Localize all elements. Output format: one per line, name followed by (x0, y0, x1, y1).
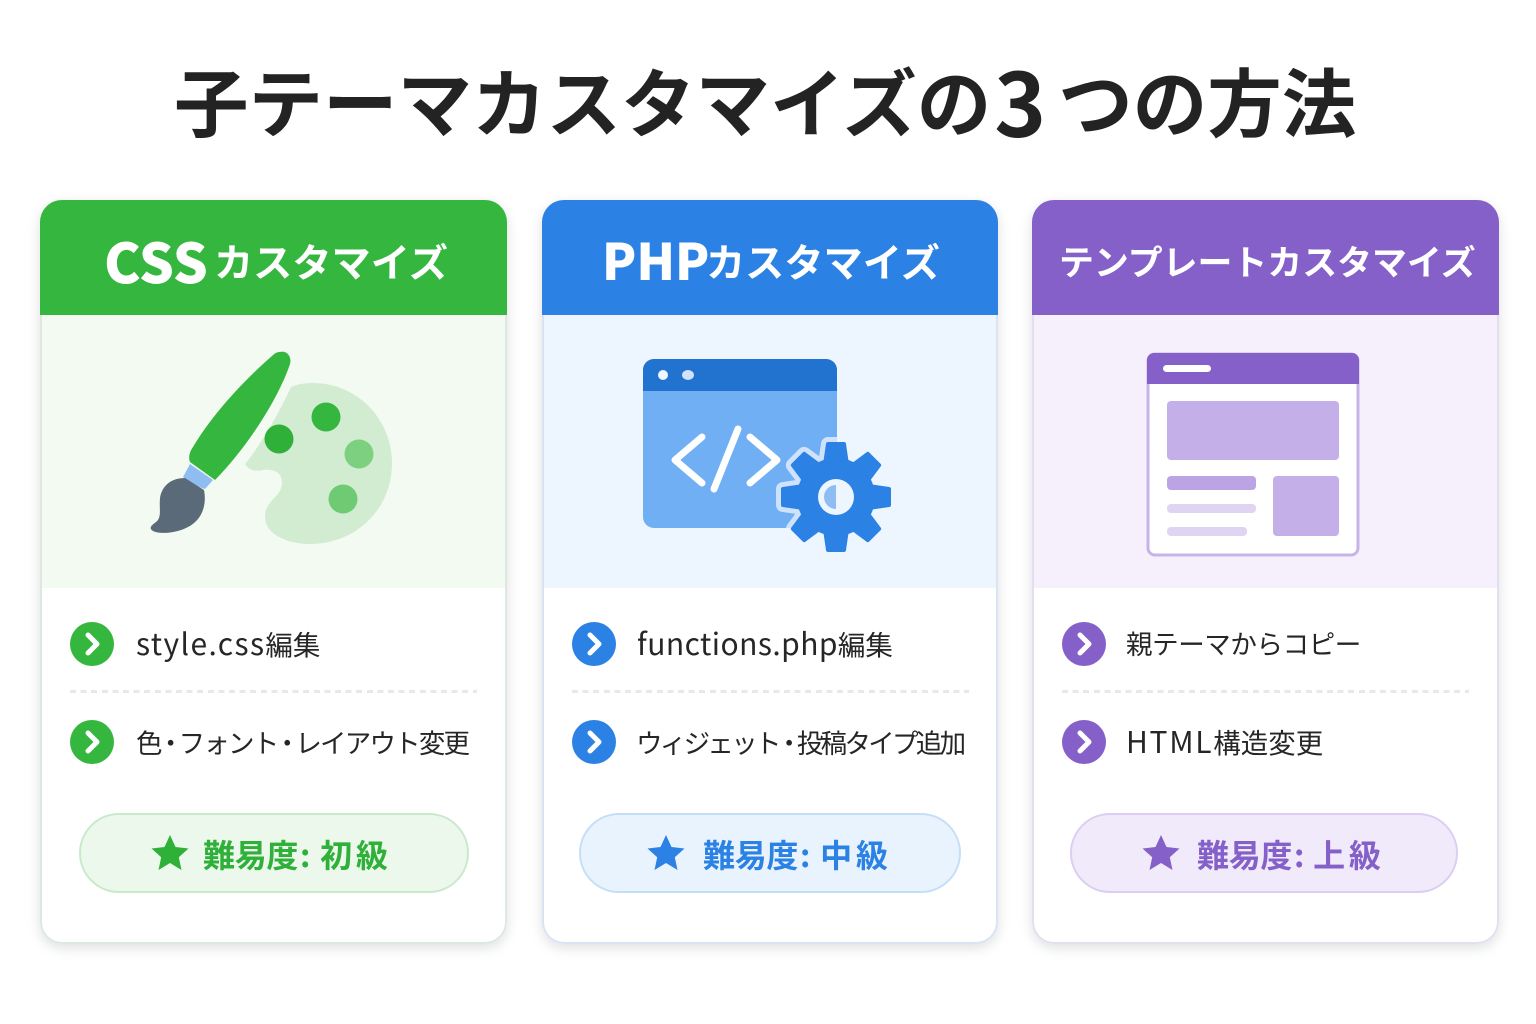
badge: difficulty beginner: : (300, 831, 310, 877)
badge: difficulty beginner: 難易度 初級 (203, 831, 388, 877)
item: copy from parent: 親テーマからコピー (1126, 623, 1361, 662)
illustration: brush and palette (40, 315, 507, 588)
panel: template customization (1032, 200, 1499, 944)
heading: CSS: CSS (104, 219, 208, 299)
badge: difficulty intermediate (579, 813, 961, 893)
heading: PHP (542, 200, 998, 315)
badge: difficulty intermediate: : (800, 831, 810, 877)
illustration: code window and gear (542, 315, 998, 588)
item: HTML structure: HTML構造変更 (1126, 718, 1323, 762)
heading: PHP: カスタマイズ (706, 233, 940, 289)
heading: CSS (40, 200, 507, 315)
badge: difficulty advanced (1070, 813, 1458, 893)
panel: PHP customization (542, 200, 998, 944)
title: 3 (994, 36, 1046, 163)
badge: difficulty advanced: 難易度 上級 (1197, 831, 1381, 877)
item: copy from parent (1062, 622, 1361, 666)
item: color font layout: 色・フォント・レイアウト変更 (136, 722, 468, 761)
panel: CSS customization (40, 200, 507, 944)
heading: template (1032, 200, 1499, 315)
badge: difficulty advanced: : (1294, 831, 1304, 877)
heading: CSS: カスタマイズ (214, 233, 448, 289)
illustration: page layout (1032, 315, 1499, 588)
item: widget post type: ウィジェット・投稿タイプ追加 (636, 722, 963, 761)
badge: difficulty intermediate: 難易度 中級 (703, 831, 888, 877)
heading: PHP: PHP (602, 223, 709, 295)
heading: template: テンプレートカスタマイズ (1059, 236, 1476, 286)
title: 子テーマカスタマイズの つの方法 (174, 46, 1356, 153)
item: functions.php: functions.php編集 (637, 620, 893, 664)
badge: difficulty beginner (79, 813, 469, 893)
item: style.css: style.css編集 (136, 620, 320, 664)
